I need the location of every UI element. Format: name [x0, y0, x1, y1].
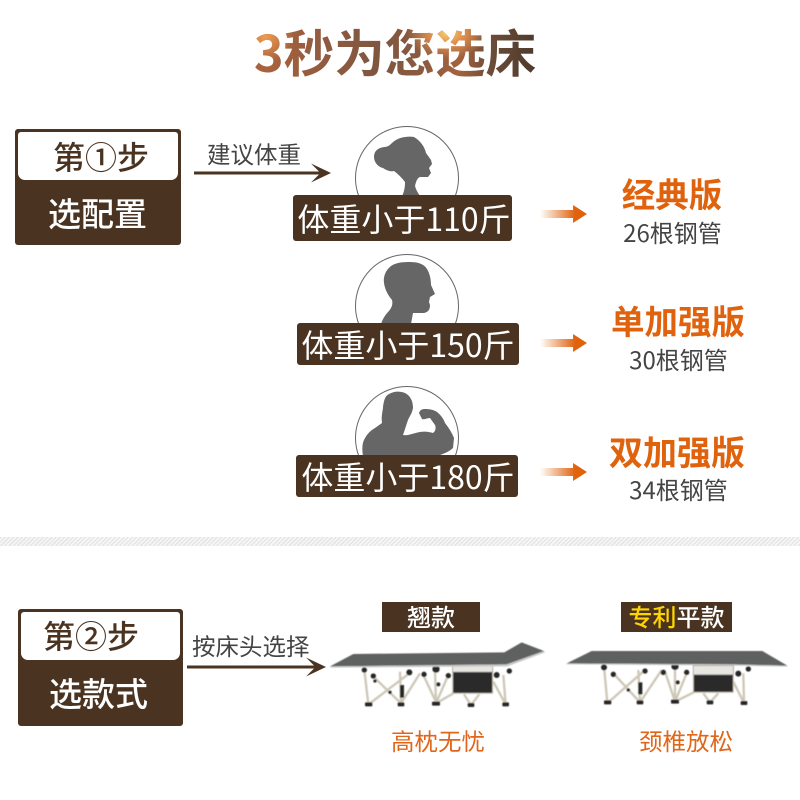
weight tag: under 110: 体重小于110斤: [297, 195, 511, 241]
arrow: to classic: [541, 205, 587, 223]
arrow: step 2: [187, 658, 326, 676]
bed: flat head: [566, 650, 788, 706]
arrow: step 1: [194, 164, 331, 182]
step 1 heading: [18, 132, 178, 180]
result: single reinforced: 单加强版: [611, 295, 745, 344]
result detail: 30 tubes: 30根钢管: [629, 341, 728, 376]
result: double reinforced: 双加强版: [609, 426, 745, 475]
style label: raised: 翘款: [407, 598, 455, 633]
step 2 heading: 第②步: [43, 612, 139, 658]
arrow label: choose by bed head: 按床头选择: [192, 628, 310, 662]
icon: man silhouette in circle: [355, 254, 459, 323]
style label: raised: [382, 602, 480, 632]
arrow: to single reinforced: [541, 334, 587, 352]
panel: step 1 badge: [15, 129, 181, 245]
result detail: 34 tubes: 34根钢管: [629, 471, 728, 506]
step 2 title: 选款式: [49, 668, 148, 716]
weight tag: under 150: 体重小于150斤: [301, 321, 515, 367]
bed: raised head: [330, 642, 545, 708]
step 1 heading: 第①步: [53, 133, 149, 179]
step 2 heading: [21, 612, 180, 660]
weight tag: under 180: 体重小于180斤: [301, 453, 515, 499]
icon: strong man silhouette in circle: [355, 386, 459, 455]
caption: high pillow: 高枕无忧: [391, 723, 485, 757]
arrow: to double reinforced: [541, 463, 587, 481]
arrow label: recommended weight: 建议体重: [207, 136, 301, 170]
result detail: 26 tubes: 26根钢管: [623, 214, 722, 249]
step 1 title: 选配置: [48, 188, 147, 236]
style label: patented flat: 专利平款: [628, 598, 724, 633]
icon: woman silhouette in circle: [355, 126, 459, 195]
result: classic: 经典版: [622, 168, 722, 217]
caption: neck relax: 颈椎放松: [639, 723, 733, 757]
panel: step 2 badge: [18, 609, 183, 726]
